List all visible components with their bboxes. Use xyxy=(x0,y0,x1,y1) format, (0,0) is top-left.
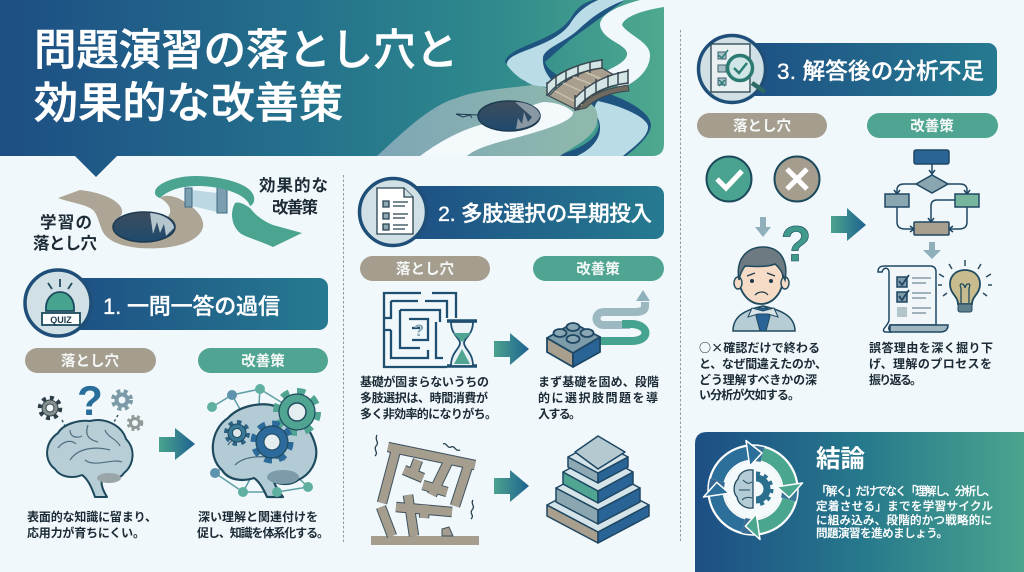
text: pitfall 1 xyxy=(27,509,157,540)
header banner xyxy=(0,0,664,177)
icon: surface brain with question xyxy=(41,377,141,497)
pill: improvement: 改善策 xyxy=(910,117,954,135)
text: improvement 1: 深い理解と関連付けを xyxy=(198,509,318,524)
text: pitfall 1: 表面的な知識に留まり、 xyxy=(27,509,157,524)
panel: 3 lack of post-answer analysis xyxy=(697,36,998,402)
text: improvement 3 xyxy=(869,340,993,387)
icon: connected brain with gears xyxy=(207,384,316,497)
text: improvement 2: 入する。 xyxy=(538,407,581,421)
icon: quiz buzzer xyxy=(42,279,80,325)
heading banner 2 xyxy=(360,178,664,246)
text: pitfall 3: ○×確認だけで終わる xyxy=(699,339,820,356)
text: improvement 2: 的に選択肢問題を導 xyxy=(538,390,658,405)
label: effective improvement xyxy=(259,176,328,217)
icon: review scroll xyxy=(878,266,948,332)
text: pitfall 3 xyxy=(699,339,827,402)
text: improvement 3: げ、理解のプロセスを xyxy=(869,356,992,371)
icon: learning cycle with brain and gear xyxy=(704,440,802,540)
icon: lego block with route arrow xyxy=(547,290,650,367)
icon: arched bridge xyxy=(547,59,629,111)
icon: answer sheet xyxy=(377,188,413,234)
panel: 2 early multiple choice xyxy=(360,178,664,545)
arrow xyxy=(831,208,866,241)
icon: light bulb xyxy=(938,260,992,312)
pill: improvement xyxy=(533,256,664,281)
title xyxy=(34,27,458,128)
pill: improvement xyxy=(198,348,328,373)
icon: small down arrow xyxy=(755,217,771,237)
text: pitfall 2: 基礎が固まらないうちの xyxy=(360,374,489,389)
text: conclusion body: 問題演習を進めましょう。 xyxy=(816,526,948,540)
arrow xyxy=(494,470,529,502)
label: effective improvement: 改善策 xyxy=(272,197,318,217)
text: improvement 1: 促し、知識を体系化する。 xyxy=(197,525,329,540)
icon: surface brain with question: ? xyxy=(77,377,103,424)
icon: collapsing structure xyxy=(371,435,479,545)
heading banner 1 xyxy=(25,270,328,336)
title: 問題演習の落とし穴と xyxy=(34,27,458,75)
text: pitfall 3: い分析が欠如する。 xyxy=(699,387,800,402)
arrow xyxy=(494,333,529,365)
text: pitfall 1: 応用力が育ちにくい。 xyxy=(27,525,145,540)
heading banner 3: 3. 解答後の分析不足 xyxy=(777,59,984,84)
title: 効果的な改善策 xyxy=(34,80,343,128)
text: improvement 3: 誤答理由を深く掘り下 xyxy=(869,340,993,355)
text: conclusion body: 定着させる」までを学習サイクル xyxy=(816,499,994,513)
arrow xyxy=(159,428,195,460)
icon: pitfall hole xyxy=(456,101,540,131)
diagram: learning pitfall to effective improvement xyxy=(33,176,328,253)
text: conclusion body: 「解く」だけでなく「理解し、分析し、 xyxy=(816,484,996,498)
icon: small down arrow xyxy=(923,242,941,259)
text: conclusion body: に組み込み、段階的かつ戦略的に xyxy=(816,513,992,527)
icon: correct mark xyxy=(706,156,752,202)
text: improvement 1 xyxy=(197,509,329,540)
heading banner 1: 1. 一問一答の過信 xyxy=(103,294,280,319)
pill: pitfall: 落とし穴 xyxy=(396,261,454,278)
icon: stable stepped pyramid xyxy=(547,436,649,543)
label: learning pitfall xyxy=(33,212,97,253)
icon: confused person: ? xyxy=(781,216,811,272)
label: learning pitfall: 落とし穴 xyxy=(33,234,97,253)
text: improvement 2 xyxy=(538,374,659,421)
panel: 1 one-question-one-answer over-reliance xyxy=(25,270,329,540)
pill: improvement: 改善策 xyxy=(241,352,285,370)
pill: pitfall: 落とし穴 xyxy=(733,118,791,135)
text: pitfall 2: 多く非効率的になりがち。 xyxy=(360,406,497,421)
text: pitfall 2: 多肢選択は、時間消費が xyxy=(360,390,488,405)
heading: conclusion: 結論 xyxy=(816,445,866,473)
pill: improvement xyxy=(867,113,998,138)
text: improvement 2: まず基礎を固め、段階 xyxy=(538,374,659,389)
heading banner 3 xyxy=(698,36,997,102)
pill: pitfall xyxy=(697,113,827,138)
icon: maze and hourglass xyxy=(384,293,477,367)
text: pitfall 2 xyxy=(360,374,497,421)
pill: pitfall xyxy=(25,348,156,373)
panel: conclusion xyxy=(695,432,1024,572)
icon: flowchart xyxy=(885,150,979,235)
illustration: winding path with pitfall and bridge xyxy=(377,0,664,156)
pill: improvement: 改善策 xyxy=(576,260,620,278)
pill: pitfall: 落とし穴 xyxy=(61,353,119,370)
text: pitfall 3: どう理解すべきかの深 xyxy=(699,372,817,387)
icon: wrong mark xyxy=(774,156,820,202)
text: conclusion body xyxy=(816,484,996,540)
pill: pitfall xyxy=(360,256,490,281)
text: pitfall 3: と、なぜ間違えたのか、 xyxy=(699,356,827,371)
icon: quiz buzzer: QUIZ xyxy=(50,315,72,325)
icon: maze and hourglass: ? xyxy=(414,321,424,340)
label: effective improvement: 効果的な xyxy=(259,176,328,195)
icon: checklist with magnifier xyxy=(711,44,765,92)
heading banner 2: 2. 多肢選択の早期投入 xyxy=(438,202,652,226)
icon: confused person xyxy=(733,216,811,331)
label: learning pitfall: 学習の xyxy=(40,212,92,232)
text: improvement 3: 振り返る。 xyxy=(869,373,922,387)
